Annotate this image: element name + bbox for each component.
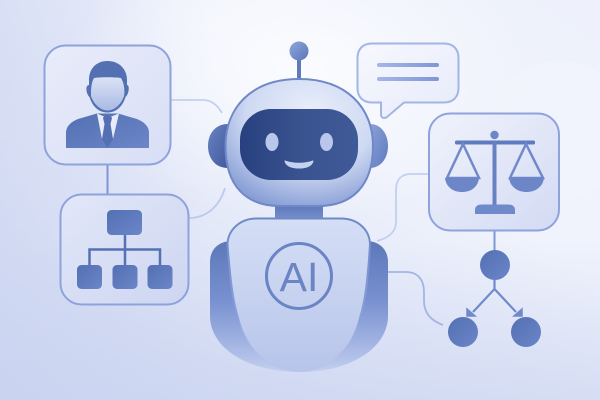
panel: executive card xyxy=(44,46,170,164)
icon: scales of justice xyxy=(445,131,544,214)
right node xyxy=(511,317,541,347)
left arm xyxy=(210,241,299,372)
icon: businessman xyxy=(66,61,149,148)
connector: executive card to robot xyxy=(171,100,222,113)
connector: scales card to decision node xyxy=(494,231,496,251)
right eye xyxy=(320,133,333,151)
visor xyxy=(240,109,358,180)
AI badge: AI xyxy=(280,254,318,300)
head xyxy=(226,79,373,206)
panel: scales card xyxy=(429,114,559,230)
left eye xyxy=(266,133,278,151)
neck xyxy=(275,203,323,223)
connector: scales card to robot xyxy=(377,174,429,241)
speech bubble xyxy=(358,44,458,118)
panel: org chart card xyxy=(60,194,188,304)
AI badge xyxy=(266,244,332,308)
left ear xyxy=(208,124,228,168)
icon: org chart xyxy=(77,210,172,289)
connector: executive card to org chart card xyxy=(106,165,108,194)
connector: robot body to decision tree xyxy=(388,272,443,325)
antenna xyxy=(290,42,308,80)
left node xyxy=(448,317,478,347)
torso xyxy=(228,218,370,372)
right arm xyxy=(299,241,388,372)
arrows xyxy=(467,279,522,316)
right ear xyxy=(370,124,388,168)
connector: org chart card to robot xyxy=(189,188,225,218)
top node xyxy=(480,250,510,280)
robot xyxy=(208,42,388,372)
decision tree xyxy=(448,250,541,347)
smile xyxy=(285,161,313,168)
